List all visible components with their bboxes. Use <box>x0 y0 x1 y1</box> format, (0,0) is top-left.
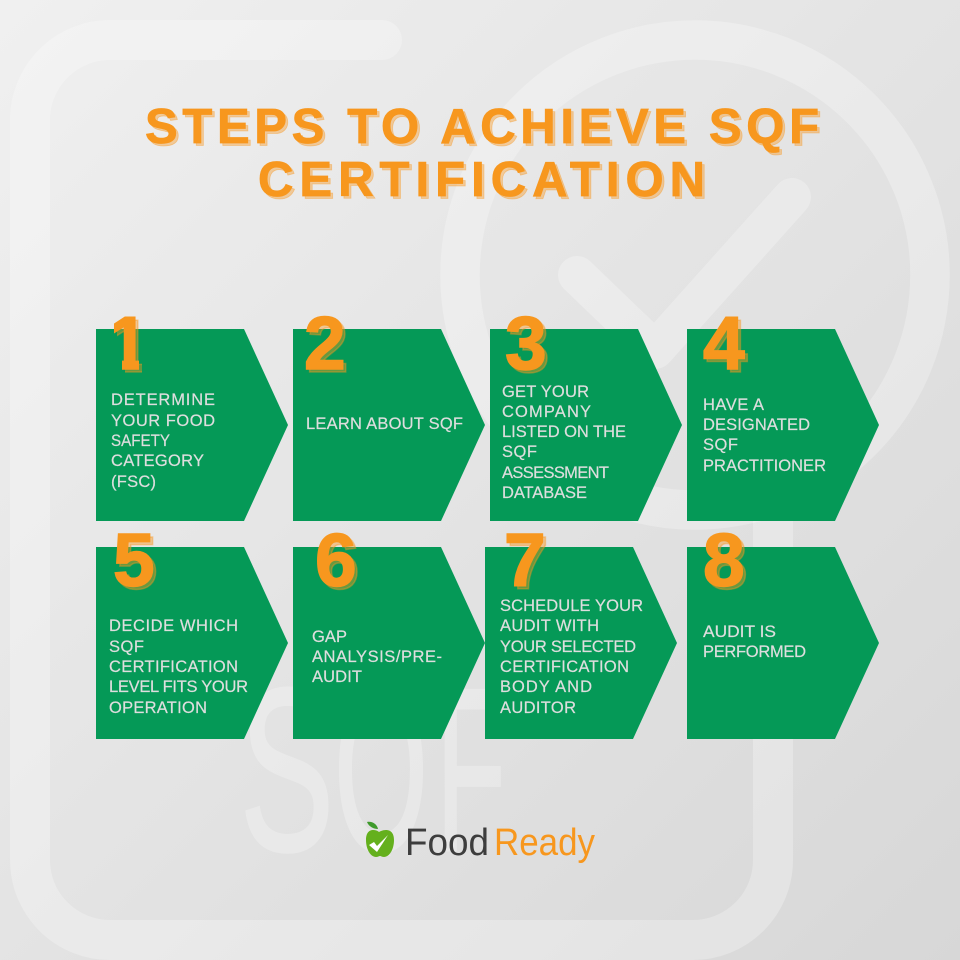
step 2: 2 <box>304 301 346 385</box>
logo: FoodReady: Ready <box>494 822 595 864</box>
step 4: PRACTITIONER <box>703 457 826 475</box>
step 4: 4 <box>703 301 745 385</box>
step 2: LEARN ABOUT SQF <box>306 415 463 433</box>
step 5 <box>96 518 288 739</box>
step 7: 7 <box>507 521 549 605</box>
step 7: SCHEDULE YOUR <box>500 597 643 615</box>
watermark: check circle <box>460 40 930 510</box>
wordmark: Food <box>405 822 489 864</box>
step 1: CATEGORY <box>111 452 204 470</box>
title <box>145 100 822 210</box>
watermark: SQF lettering <box>392 808 418 849</box>
step 7 <box>485 518 677 739</box>
step 5: 5 <box>116 521 158 605</box>
step 2: 2 <box>307 304 349 388</box>
step 1: 1 <box>110 304 152 388</box>
step 8: 8 <box>706 521 748 605</box>
step 3: 3 <box>505 301 547 385</box>
step 4: HAVE A <box>703 396 764 414</box>
step 7: CERTIFICATION <box>500 658 629 676</box>
watermark: SQF lettering: Q <box>334 641 428 900</box>
step 6: GAP <box>312 628 347 646</box>
step 3: 3 <box>508 304 550 388</box>
title: CERTIFICATION <box>260 156 708 210</box>
step 7: BODY AND <box>500 678 592 696</box>
watermark: clipboard outline <box>30 40 773 940</box>
step 6: 6 <box>315 518 357 602</box>
step 6: ANALYSIS/PRE- <box>312 648 442 666</box>
step 4 <box>687 301 879 521</box>
step 3: COMPANY <box>502 403 591 421</box>
step 8: PERFORMED <box>703 643 806 661</box>
title: CERTIFICATION <box>258 153 705 207</box>
step 5: SQF <box>109 638 144 656</box>
logo: FoodReady <box>366 822 595 864</box>
icon: green apple with check <box>366 822 394 857</box>
step 5: OPERATION <box>109 699 207 717</box>
step 7: 7 <box>504 518 546 602</box>
step 3 <box>490 301 682 521</box>
step 3: DATABASE <box>502 484 587 502</box>
step 8: AUDIT IS <box>703 623 776 641</box>
step 1: DETERMINE <box>111 391 215 409</box>
step 7: AUDITOR <box>500 699 576 717</box>
step 1: YOUR FOOD <box>111 412 215 430</box>
step 6: 6 <box>318 521 360 605</box>
title: STEPS TO ACHIEVE SQF <box>148 102 822 156</box>
step 7: YOUR SELECTED <box>500 638 636 656</box>
step 7: AUDIT WITH <box>500 617 599 635</box>
step 5: LEVEL FITS YOUR <box>109 678 248 696</box>
step 1: (FSC) <box>111 473 156 491</box>
step 3: GET YOUR <box>502 383 589 401</box>
step 3: SQF <box>502 443 537 461</box>
step 4: SQF <box>703 436 738 454</box>
step 5: 5 <box>113 518 155 602</box>
step 3: LISTED ON THE <box>502 423 626 441</box>
step 5: CERTIFICATION <box>109 658 238 676</box>
step 8 <box>687 518 879 739</box>
step 3: ASSESSMENT <box>502 464 609 482</box>
step 2 <box>293 301 485 521</box>
step 6: AUDIT <box>312 668 362 686</box>
step 1: 1 <box>107 301 149 385</box>
step 8: 8 <box>703 518 745 602</box>
text: F <box>436 641 506 900</box>
watermark: SQF lettering: S <box>240 641 334 900</box>
step 6 <box>293 518 485 739</box>
step 1: SAFETY <box>111 432 170 450</box>
step 1 <box>96 301 288 521</box>
step 4: DESIGNATED <box>703 416 810 434</box>
step 4: 4 <box>706 304 748 388</box>
step 5: DECIDE WHICH <box>109 617 238 635</box>
title: STEPS TO ACHIEVE SQF <box>145 100 819 154</box>
